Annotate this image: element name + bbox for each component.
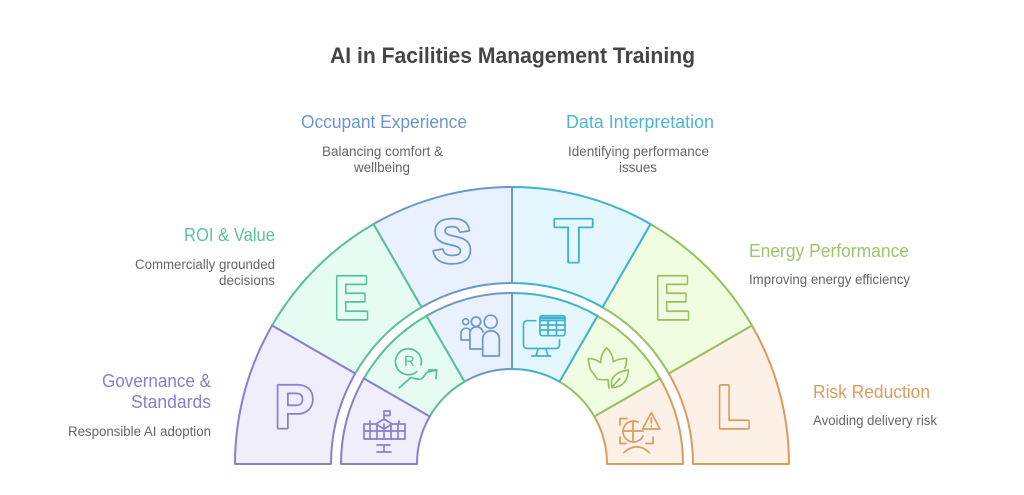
inner segment cyan bbox=[512, 293, 598, 382]
label: Data Interpretation bbox=[566, 112, 714, 175]
label: Governance & Standards: Standards bbox=[131, 392, 211, 412]
icon: monitor with data table bbox=[524, 316, 565, 356]
label: Data Interpretation: Identifying performance bbox=[568, 144, 709, 159]
label: Risk Reduction: Avoiding delivery risk bbox=[813, 413, 937, 428]
label: Data Interpretation: issues bbox=[619, 160, 657, 175]
outer segment E right: E bbox=[655, 264, 690, 333]
inner segment lime bbox=[560, 316, 660, 416]
inner ring: icons bbox=[341, 293, 683, 464]
inner segment green bbox=[364, 316, 464, 416]
outer segment P bbox=[235, 326, 355, 464]
icon: return on investment bbox=[395, 349, 437, 388]
label: ROI & Value: Commercially grounded bbox=[135, 257, 275, 272]
inner segment orange bbox=[594, 378, 683, 464]
label: ROI & Value: ROI & Value bbox=[184, 225, 275, 245]
label: Risk Reduction bbox=[813, 382, 937, 428]
outer segment S: S bbox=[432, 208, 472, 276]
label: Energy Performance: Improving energy efficiency bbox=[749, 272, 910, 287]
label: Occupant Experience: Occupant Experience bbox=[301, 112, 467, 132]
outer segment L: L bbox=[717, 373, 750, 442]
outer segment E left: E bbox=[334, 264, 369, 333]
inner segment purple bbox=[341, 378, 430, 464]
outer segment E left bbox=[272, 224, 422, 374]
label: Governance & Standards bbox=[68, 371, 211, 439]
label: Governance & Standards: Responsible AI adoption bbox=[68, 424, 211, 439]
title: AI in Facilities Management Training bbox=[330, 43, 695, 68]
icon: building on stand bbox=[364, 411, 405, 452]
outer ring: STEEPL letters bbox=[235, 187, 789, 464]
icon: risk analysis bbox=[620, 412, 660, 452]
icon: group of people bbox=[461, 315, 499, 356]
label: Risk Reduction: Risk Reduction bbox=[813, 382, 930, 402]
outer segment P: P bbox=[274, 373, 314, 442]
outer segment T bbox=[512, 187, 650, 307]
icon: return on investment: R bbox=[404, 353, 415, 370]
label: ROI & Value bbox=[135, 225, 275, 288]
label: ROI & Value: decisions bbox=[219, 273, 275, 288]
icon: leaves bbox=[588, 348, 628, 388]
label: Occupant Experience: Balancing comfort & bbox=[322, 144, 443, 159]
outer segment L bbox=[669, 326, 789, 464]
label: Energy Performance: Energy Performance bbox=[749, 241, 909, 261]
label: Occupant Experience: wellbeing bbox=[353, 160, 410, 175]
label: Energy Performance bbox=[749, 241, 910, 287]
outer segment E right bbox=[602, 224, 752, 374]
label: Occupant Experience bbox=[301, 112, 467, 175]
inner segment blue bbox=[426, 293, 512, 382]
outer segment S bbox=[374, 187, 512, 307]
label: Governance & Standards: Governance & bbox=[102, 371, 211, 391]
label: Data Interpretation: Data Interpretation bbox=[566, 112, 714, 132]
outer segment T: T bbox=[554, 207, 592, 276]
